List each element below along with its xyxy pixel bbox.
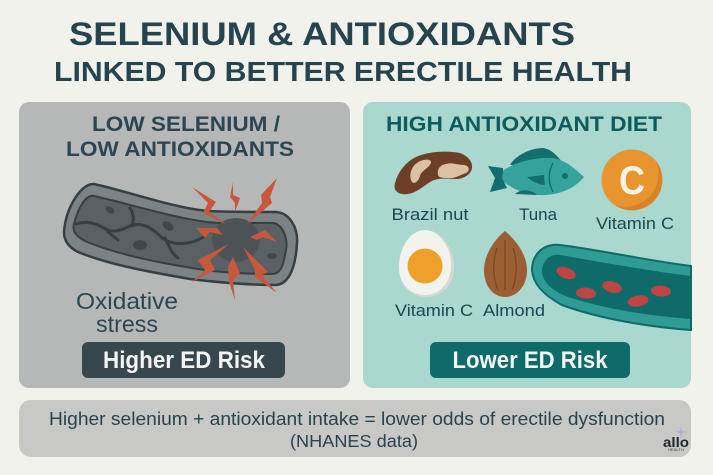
label: vitamin C: Vitamin C xyxy=(596,215,674,233)
label: brazil nut: Brazil nut xyxy=(392,206,469,224)
title xyxy=(54,16,632,87)
logo: allo health: HEALTH xyxy=(668,448,685,452)
label: oxidative stress: stress xyxy=(96,311,158,337)
icon: healthy blood vessel xyxy=(532,245,691,330)
badge: lower ED risk: Lower ED Risk xyxy=(452,347,608,374)
icon: vitamin C: C xyxy=(619,159,645,203)
heading: low selenium: LOW SELENIUM / xyxy=(92,112,280,136)
label: oxidative stress: Oxidative xyxy=(76,288,178,314)
cracks xyxy=(76,205,277,259)
label: almond: Almond xyxy=(483,302,545,320)
footer summary bar: (NHANES data) xyxy=(290,431,418,451)
icon: almond xyxy=(484,231,527,297)
heading: low selenium: LOW ANTIOXIDANTS xyxy=(66,137,294,161)
label: vitamin C egg: Vitamin C xyxy=(395,302,473,320)
badge: lower ED risk xyxy=(430,342,630,378)
title: LINKED TO BETTER ERECTILE HEALTH xyxy=(54,56,632,87)
footer summary bar: Higher selenium + antioxidant intake = lower odds of erectile dysfunction xyxy=(49,408,665,429)
badge: higher ED risk: Higher ED Risk xyxy=(103,347,266,374)
lightning sparks xyxy=(192,178,277,300)
icon: egg xyxy=(399,230,454,297)
heading: high antioxidant diet: HIGH ANTIOXIDANT DIET xyxy=(386,112,662,136)
icon: vitamin C xyxy=(602,150,662,210)
panel: low selenium xyxy=(19,102,350,388)
footer summary bar xyxy=(19,400,691,457)
icon: tuna xyxy=(488,148,584,195)
panel: high antioxidant diet xyxy=(363,102,691,388)
icon: damaged blood vessel xyxy=(64,178,297,300)
heading: low selenium xyxy=(66,112,294,161)
icon: brazil nut xyxy=(395,152,472,194)
label: oxidative stress xyxy=(76,288,178,337)
logo: allo health: allo xyxy=(663,434,689,450)
label: tuna: Tuna xyxy=(519,206,558,224)
title: SELENIUM & ANTIOXIDANTS xyxy=(69,16,575,52)
logo: allo health xyxy=(663,426,689,452)
badge: higher ED risk xyxy=(82,342,285,378)
